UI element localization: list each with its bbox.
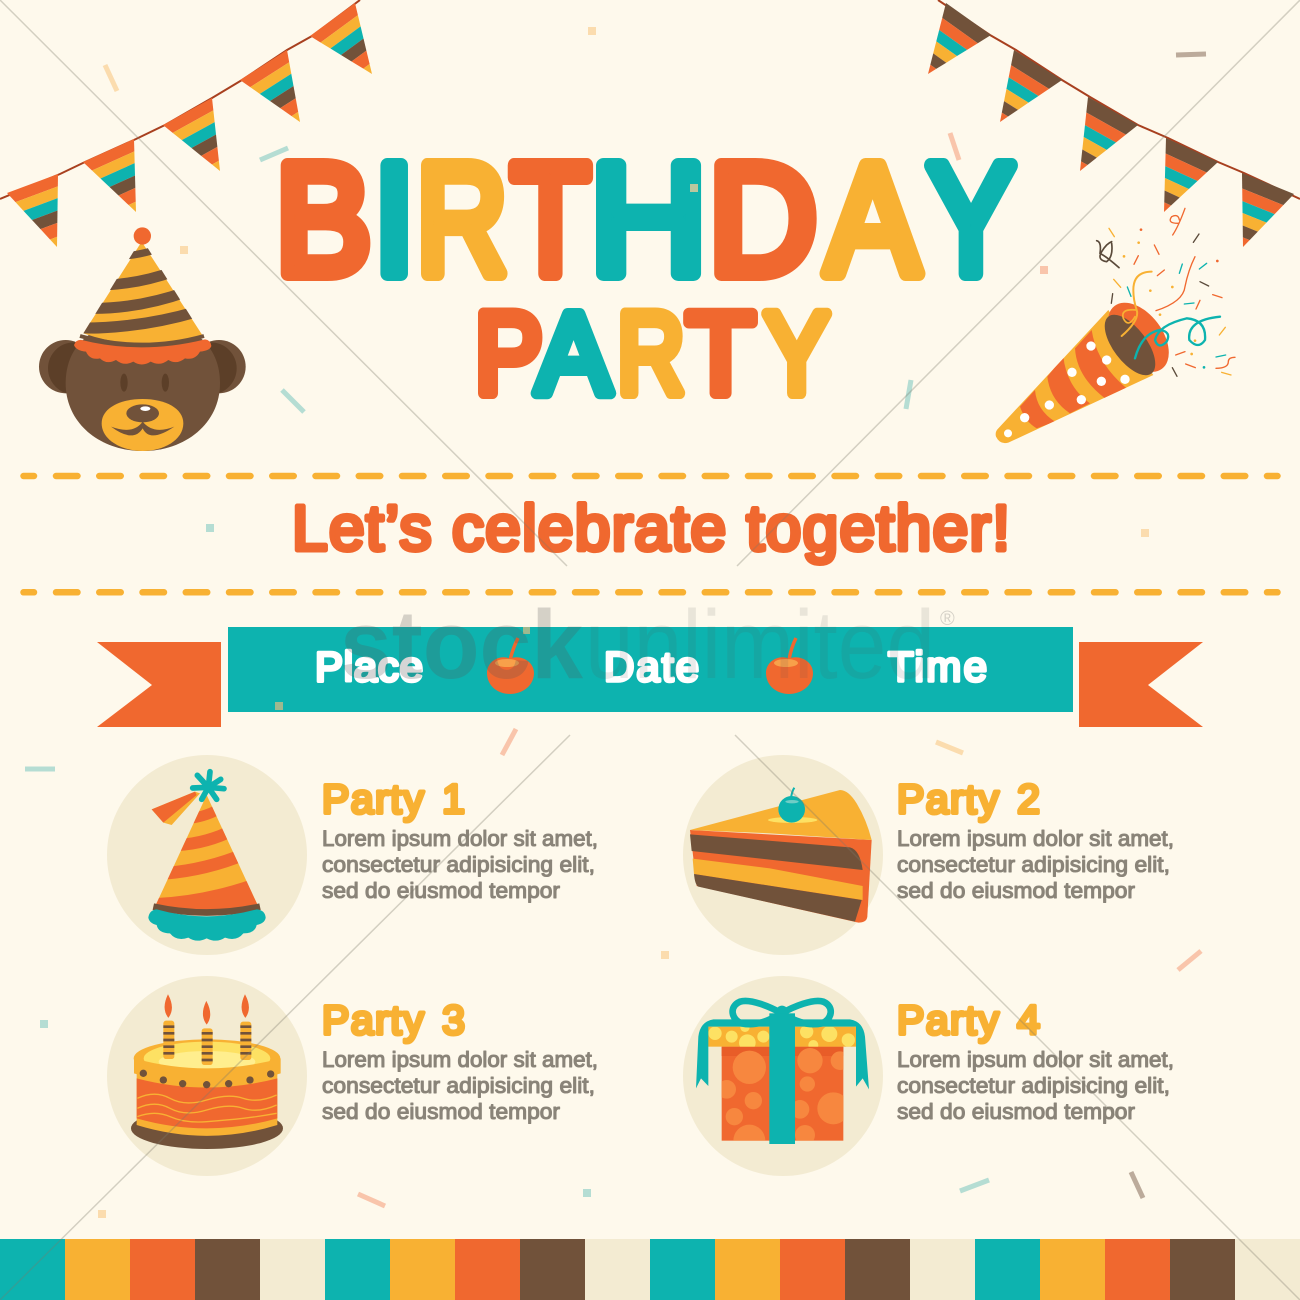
confetti on title [690,184,698,192]
title: BIRTHDAY: R [417,132,507,308]
text block: sed do eiusmod tempor [322,1099,560,1124]
panel: party 3 [107,976,598,1176]
heading: Party 3 [322,997,466,1043]
title: PARTY [475,290,829,418]
text block [897,1047,1174,1124]
title: PARTY: P [475,290,542,418]
title: PARTY: A [536,290,611,418]
ribbon: left tail [97,642,221,727]
text block: consectetur adipisicing elit, [322,1073,595,1098]
banner: place, date, time: Place [315,643,423,690]
title: BIRTHDAY: T [511,132,590,308]
title: BIRTHDAY: A [826,132,919,308]
text block: sed do eiusmod tempor [897,1099,1135,1124]
title: BIRTHDAY: Y [927,132,1015,308]
ribbon: right tail [1079,642,1203,727]
icon: cherry one [487,638,534,694]
heading: Party 2 [897,776,1041,822]
title: BIRTHDAY: I [374,132,414,308]
text block: sed do eiusmod tempor [897,878,1135,903]
text block: Lorem ipsum dolor sit amet, [322,1047,598,1072]
banner: place, date, time: Time [888,643,987,690]
icon: party popper [996,208,1235,443]
icon: bear with party hat [39,227,246,451]
bunting: top right [928,0,1300,268]
icon: birthday cake [107,976,307,1176]
banner: place, date, time: Date [604,643,699,690]
icon: cherry two [766,638,813,694]
watermark: unlimited [585,590,935,699]
text block: Lorem ipsum dolor sit amet, [897,826,1174,851]
text block: sed do eiusmod tempor [322,878,560,903]
panel: party 1 [107,755,598,955]
watermark: stock [340,590,584,699]
text block: consectetur adipisicing elit, [897,852,1170,877]
heading: Party 4 [897,997,1041,1043]
banner: place, date, time [228,627,1073,712]
title: PARTY: Y [764,290,829,418]
watermark [340,590,955,699]
text block [897,826,1174,903]
panel: party 4 [683,976,1174,1176]
title: PARTY: R [617,290,685,418]
panel: party 2 [683,755,1174,955]
bunting: top left [0,0,417,247]
divider: top dashed line [24,473,1278,479]
icon: party hat [107,755,307,955]
title: PARTY: T [686,290,755,418]
divider: bottom dashed line [24,589,1278,596]
heading: Party 1 [322,776,466,822]
text block: consectetur adipisicing elit, [322,852,595,877]
text block [322,1047,598,1124]
text block: Lorem ipsum dolor sit amet, [322,826,598,851]
text block: Lorem ipsum dolor sit amet, [897,1047,1174,1072]
icon: gift box [683,976,883,1176]
icon: cake slice [683,755,883,955]
bottom stripe band [0,1239,1300,1300]
watermark: ® [940,608,955,630]
title: BIRTHDAY: B [276,132,371,308]
text block [322,826,598,903]
title: BIRTHDAY: D [709,132,817,308]
text block: consectetur adipisicing elit, [897,1073,1170,1098]
title: BIRTHDAY: H [590,132,706,308]
tagline: Let’s celebrate together! [292,492,1010,564]
title: BIRTHDAY [276,132,1015,308]
